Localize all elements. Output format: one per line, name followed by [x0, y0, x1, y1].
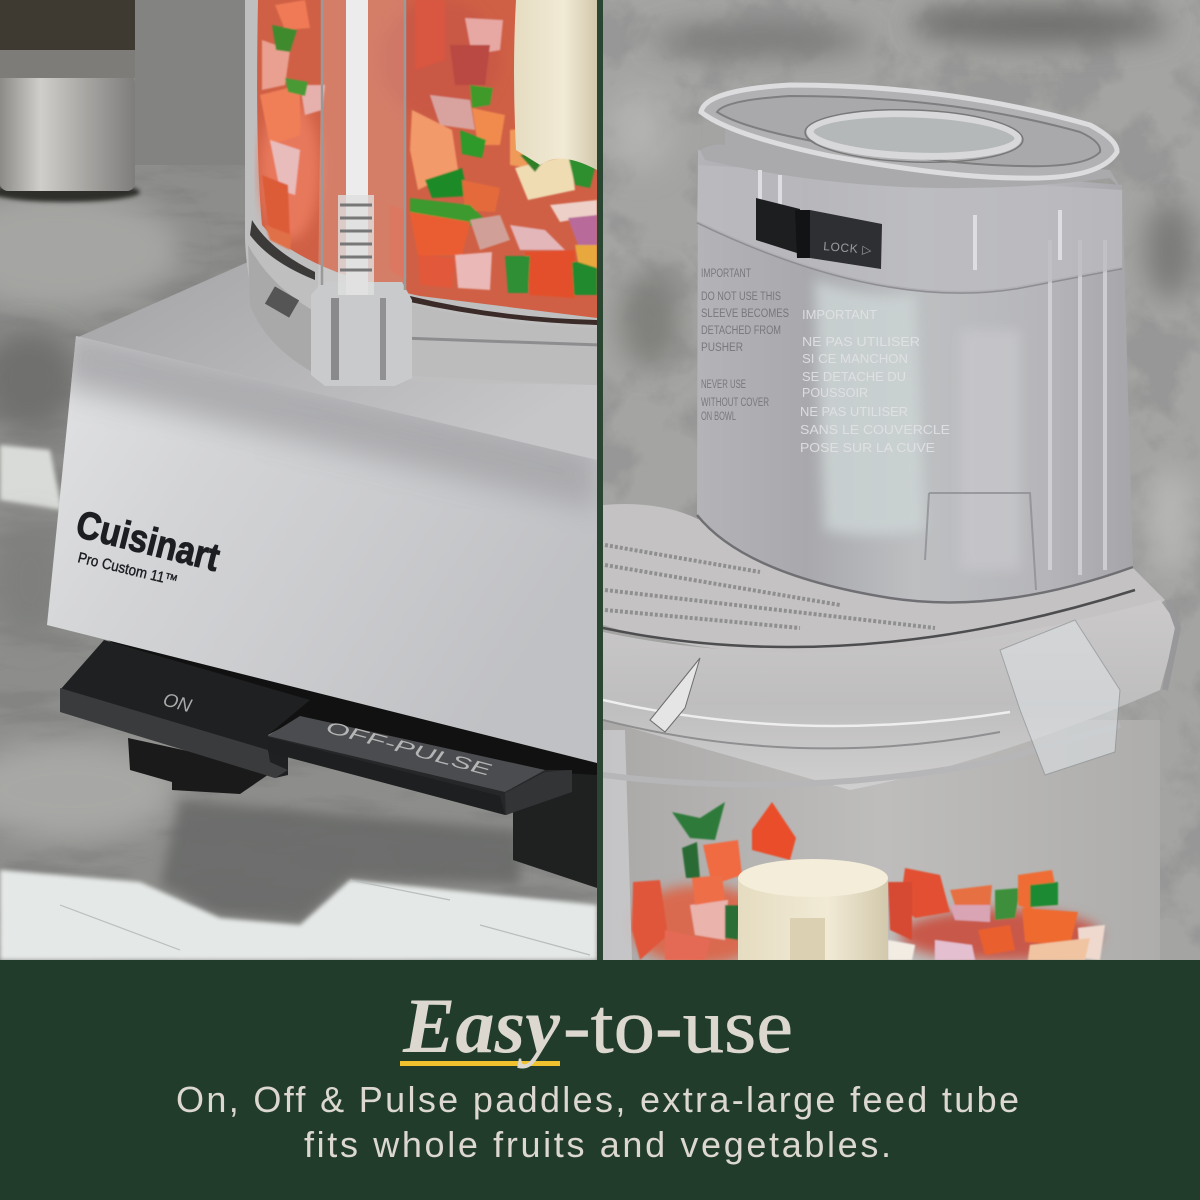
salsa	[630, 802, 1105, 965]
embossed warnings, French: POSE SUR LA CUVE	[800, 441, 935, 455]
embossed warnings, English: IMPORTANT	[701, 268, 751, 280]
embossed warnings, English: NEVER USE	[701, 379, 746, 391]
feed tube collar	[697, 130, 1122, 292]
appliance base front face	[47, 320, 597, 763]
handle column	[311, 0, 412, 386]
paddle shadow recess	[100, 636, 597, 775]
embossed warnings, English: ON BOWL	[701, 411, 736, 423]
base black foot block	[128, 738, 597, 888]
embossed warnings, English: PUSHER	[701, 342, 743, 354]
panel: right photo, feed tube and lid	[603, 0, 1200, 965]
embossed warnings, English	[701, 268, 789, 423]
embossed warnings, French: NE PAS UTILISER	[802, 335, 920, 349]
panel: left photo, base and paddles	[0, 0, 597, 960]
body text: fits whole fruits and vegetables.	[304, 1124, 891, 1165]
OFF-PULSE paddle	[268, 716, 572, 815]
stone background	[603, 0, 1200, 960]
embossed warnings, English: WITHOUT COVER	[701, 397, 769, 409]
heading: Easy-to-use	[400, 982, 793, 1069]
accent underline	[400, 1061, 560, 1066]
embossed warnings, French: NE PAS UTILISER	[800, 405, 908, 419]
salsa chunks	[260, 0, 597, 298]
feed tube body	[697, 150, 1133, 602]
heading: Easy-to-use: Easy	[402, 982, 560, 1069]
LOCK tab	[756, 198, 882, 269]
work bowl with salsa	[245, 0, 597, 386]
pusher oval rim	[701, 85, 1117, 178]
feed shaft cream column	[514, 0, 597, 170]
bowl handle left	[603, 730, 632, 960]
divider	[597, 0, 603, 975]
logo: Cuisinart Pro Custom 11: Cuisinart	[72, 503, 224, 580]
embossed warnings, French: SANS LE COUVERCLE	[800, 423, 950, 437]
lid disc top	[603, 504, 1165, 658]
appliance base top surface	[76, 262, 597, 462]
body text	[176, 1079, 1019, 1165]
bowl bottom rim	[410, 296, 597, 325]
ON paddle: ON	[161, 690, 194, 717]
body text: On, Off & Pulse paddles, extra-large feed tube	[176, 1079, 1019, 1120]
embossed warnings, French	[800, 308, 950, 455]
LOCK tab: LOCK ▷	[823, 239, 873, 257]
counter surface	[0, 0, 597, 960]
ON paddle	[60, 640, 310, 778]
embossed warnings, English: DO NOT USE THIS	[701, 291, 781, 303]
heading: Easy-to-use: -to-use	[563, 982, 793, 1069]
lower work bowl	[603, 720, 1160, 965]
embossed warnings, English: DETACHED FROM	[701, 325, 781, 337]
background wall	[135, 0, 250, 165]
lid embossed text	[605, 545, 935, 628]
embossed warnings, French: POUSSOIR	[802, 386, 868, 400]
food pusher shaft top	[738, 859, 888, 960]
embossed warnings, French: SI CE MANCHON	[802, 352, 908, 366]
panel: bottom caption band	[0, 960, 1200, 1200]
embossed warnings, French: SE DETACHE DU	[802, 370, 906, 384]
lid rim	[603, 590, 1178, 790]
embossed warnings, English: SLEEVE BECOMES	[701, 308, 789, 320]
embossed warnings, French: IMPORTANT	[802, 308, 877, 322]
logo: Cuisinart Pro Custom 11: Pro Custom 11™	[76, 549, 179, 590]
OFF-PULSE paddle: OFF-PULSE	[324, 718, 494, 780]
spice shaker	[0, 0, 140, 202]
